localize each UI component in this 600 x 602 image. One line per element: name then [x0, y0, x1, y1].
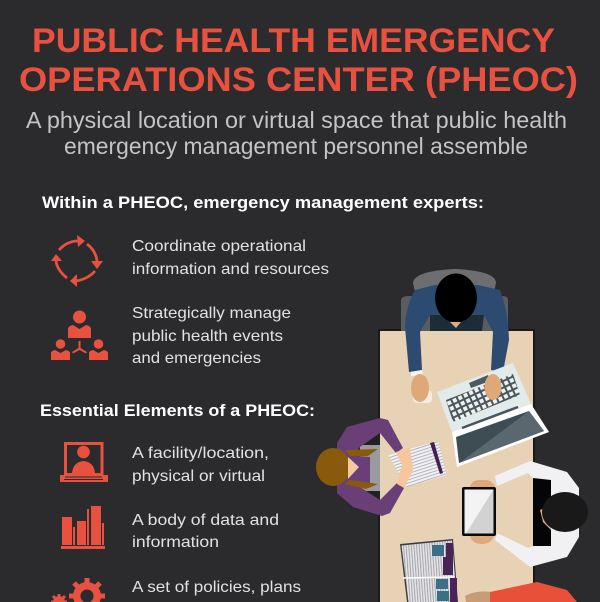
heading: essential elements: Essential Elements of a PHEOC: [40, 401, 315, 420]
text: coordinate: information and resources [132, 261, 329, 278]
icon: gears [51, 578, 105, 602]
text: data: A body of data and [132, 512, 279, 529]
figure: man at top with mouse [401, 269, 509, 403]
subtitle: A physical location or virtual space that public health [26, 107, 567, 133]
text: strategically: and emergencies [132, 350, 261, 367]
subtitle: emergency management personnel assemble [64, 133, 528, 159]
heading: within a PHEOC: Within a PHEOC, emergency management experts: [42, 193, 484, 212]
figure: person in red [465, 582, 577, 602]
text: policies: A set of policies, plans [132, 579, 301, 596]
text: coordinate: Coordinate operational [132, 238, 306, 255]
text: facility [132, 445, 269, 485]
icon: laptop user [60, 442, 108, 482]
icon: people network [51, 310, 108, 360]
icon: bar chart [61, 506, 105, 549]
icon: circular arrows [51, 235, 103, 287]
text: strategically: public health events [132, 328, 283, 345]
text: coordinate [132, 238, 329, 278]
text: strategically [132, 305, 291, 367]
text: facility: A facility/location, [132, 445, 269, 462]
subtitle [26, 107, 567, 159]
laptop [437, 363, 549, 467]
meeting table [378, 329, 535, 602]
title [19, 22, 578, 99]
text: data [132, 512, 279, 551]
text: strategically: Strategically manage [132, 305, 291, 322]
title: PUBLIC HEALTH EMERGENCY [32, 22, 555, 60]
text: facility: physical or virtual [132, 468, 265, 485]
figure: woman with document [316, 418, 447, 516]
text: data: information [132, 534, 219, 551]
figure: man with tablet [462, 461, 588, 567]
title: OPERATIONS CENTER (PHEOC) [19, 61, 578, 99]
document [400, 539, 458, 602]
